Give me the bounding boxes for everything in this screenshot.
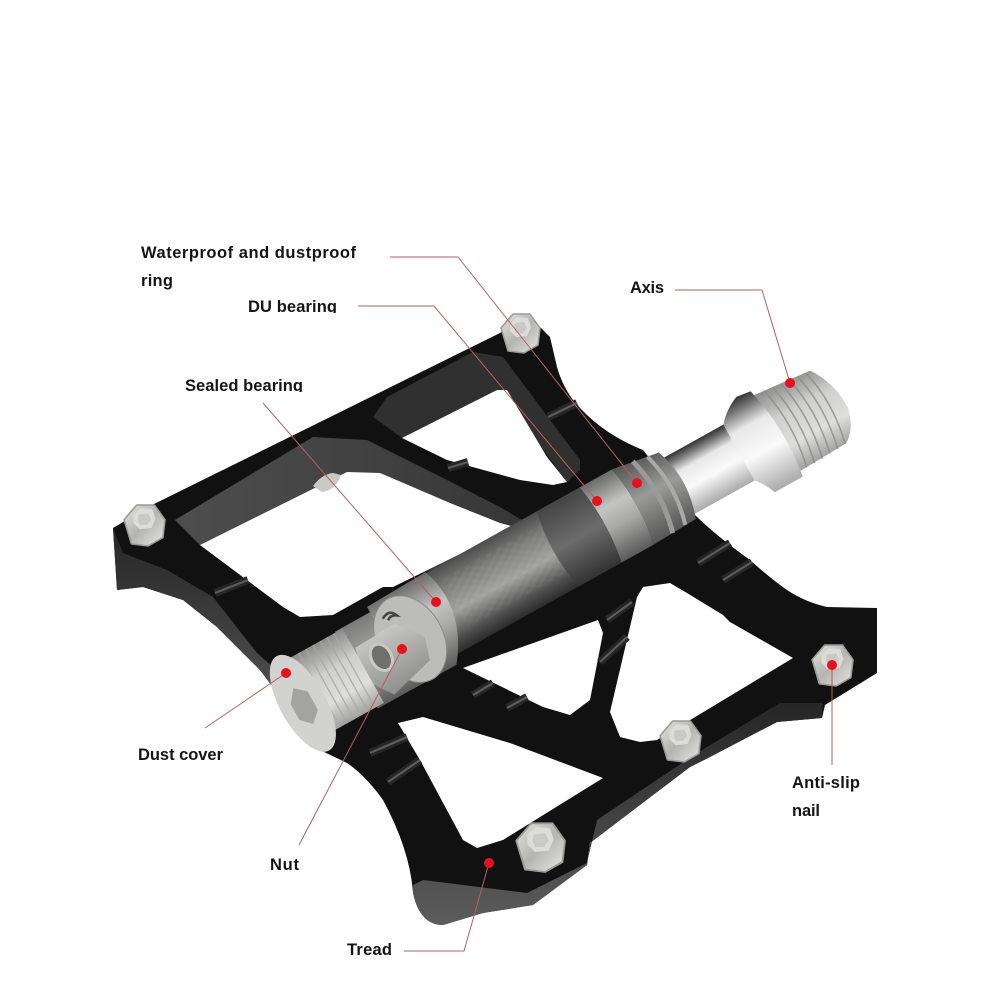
dark sleeve <box>533 485 625 589</box>
callout: DU bearing <box>240 298 602 506</box>
callout: dust cover <box>138 668 291 764</box>
carbon texture <box>441 523 570 628</box>
callout: waterproof and dustproof ring: Waterproof and dustproof <box>141 244 356 262</box>
callout: nut <box>270 644 407 874</box>
left side bevel <box>113 528 320 750</box>
anti-slip nail, top <box>501 314 540 353</box>
carbon tube <box>402 470 653 662</box>
seal disc <box>359 583 461 695</box>
callout: anti-slip nail: Anti-slip <box>792 774 860 792</box>
end thread grooves <box>764 366 850 467</box>
callout: axis: Axis <box>630 279 664 297</box>
near thread grooves <box>299 633 375 727</box>
grooved ring <box>612 442 703 545</box>
callout: sealed bearing: Sealed bearing <box>185 377 303 395</box>
callout: waterproof and dustproof ring: ring <box>141 272 173 290</box>
callout: waterproof and dustproof ring <box>141 244 642 488</box>
callout: tread: Tread <box>347 941 392 959</box>
bright bearing band <box>580 467 657 563</box>
callout: dust cover: Dust cover <box>138 746 224 764</box>
window bevel, lower-left <box>175 437 530 617</box>
anti-slip nail, left <box>124 505 165 546</box>
callout: axis <box>630 279 795 388</box>
flange <box>715 386 805 498</box>
front side bevel <box>413 703 823 925</box>
anti-slip nail, right <box>812 645 853 686</box>
pedal illustration <box>113 314 877 925</box>
frame windows <box>200 390 793 848</box>
nut face <box>348 614 442 704</box>
callout: anti-slip nail: nail <box>792 802 820 820</box>
anti-slip nail, front <box>516 823 565 872</box>
near thread <box>283 629 384 736</box>
silver shaft <box>662 415 772 515</box>
anti-slip nail, rear <box>313 473 341 492</box>
brand text: PEL <box>328 631 351 650</box>
callout: DU bearing: DU bearing <box>248 298 337 316</box>
window bevel, upper <box>373 352 580 482</box>
callout: tread <box>347 858 494 959</box>
anti-slip nail, middle <box>660 721 701 762</box>
hub body <box>335 602 430 709</box>
frame ribs <box>215 403 752 782</box>
callout: sealed bearing <box>180 377 441 607</box>
end thread <box>753 358 864 473</box>
nut hole <box>366 640 397 674</box>
hex socket <box>284 683 323 729</box>
callout: anti-slip nail <box>792 660 860 820</box>
seal band <box>366 569 477 689</box>
axle <box>255 352 871 762</box>
brand logo <box>382 610 397 622</box>
dust cover <box>257 645 349 762</box>
pedal frame body <box>113 322 877 925</box>
callout: nut: Nut <box>270 856 300 874</box>
